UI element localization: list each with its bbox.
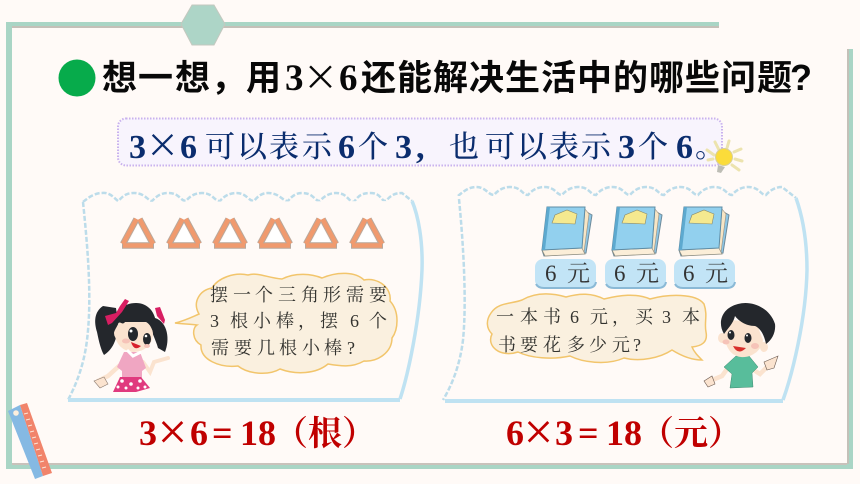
three books	[542, 207, 729, 256]
hint sentence: 个	[638, 131, 668, 164]
title: 一	[138, 59, 173, 98]
hint sentence: 示	[581, 131, 612, 164]
hint sentence: 表	[549, 131, 579, 164]
title: 6	[339, 58, 358, 99]
equation: yuan: 18	[606, 413, 642, 453]
equation: sticks: 3	[139, 413, 157, 453]
hint sentence: ×	[146, 119, 179, 167]
tag 2	[605, 259, 666, 288]
hint sentence: 表	[269, 131, 299, 164]
hint sentence: 个	[358, 131, 388, 164]
title: 中	[577, 59, 612, 98]
equation: yuan: =	[578, 413, 599, 453]
paper card	[68, 193, 422, 400]
girl character	[94, 299, 168, 392]
title: 的	[613, 59, 648, 98]
title: 生	[505, 59, 540, 98]
hint sentence: 6	[180, 129, 197, 166]
equation: yuan: 6	[506, 413, 524, 453]
equation: sticks	[139, 406, 376, 454]
equation: yuan: （元）	[640, 415, 742, 453]
title: 想	[102, 59, 137, 98]
bubble text: 摆一个三角形需要	[210, 285, 387, 305]
hint sentence: 可	[485, 131, 515, 164]
equation: sticks: 18	[240, 413, 276, 453]
equation: sticks: =	[212, 413, 233, 453]
hint sentence: 也	[449, 131, 479, 164]
tag 3	[674, 259, 735, 288]
icon: ruler	[8, 403, 52, 479]
title: 还	[361, 59, 396, 98]
tag 2: 6 元	[614, 261, 659, 286]
speech bubble	[175, 273, 397, 373]
bubble text: 3 根小棒，摆 6 个	[210, 310, 387, 331]
hint sentence: 3	[129, 129, 146, 166]
hint sentence: 。	[695, 131, 725, 164]
bubble text	[210, 285, 387, 358]
hint sentence: 3	[618, 129, 635, 166]
panel: triangle problem	[68, 193, 422, 400]
equation: sticks: 6	[190, 413, 208, 453]
equation: yuan: ×	[522, 406, 555, 454]
title: 能	[397, 59, 432, 98]
bubble text: 书要花多少元?	[498, 335, 641, 355]
panel: book problem	[443, 187, 807, 402]
hint box	[118, 118, 725, 167]
equation: sticks: （根）	[274, 415, 376, 453]
title: 哪	[649, 59, 684, 98]
title: 些	[685, 59, 720, 98]
title: ?	[790, 57, 812, 98]
equation: sticks: ×	[156, 406, 189, 454]
title: 决	[469, 59, 504, 98]
row of six stick triangles	[122, 219, 383, 246]
hint sentence: 6	[676, 129, 693, 166]
title: ×	[303, 50, 338, 101]
hint sentence: ,	[416, 129, 424, 166]
equation: yuan	[506, 406, 742, 454]
hint sentence: 3	[395, 129, 412, 166]
hint sentence: 示	[302, 131, 333, 164]
bubble text: 需要几根小棒?	[211, 337, 355, 358]
hint sentence: 以	[237, 131, 269, 164]
title: 问	[721, 59, 756, 98]
hexagon ornament	[181, 5, 225, 45]
title: ，	[211, 59, 246, 98]
title: 用	[246, 59, 281, 98]
hint sentence: 6	[338, 129, 355, 166]
speech bubble	[487, 294, 706, 362]
price tags	[535, 259, 735, 288]
title: 3	[285, 58, 304, 99]
title: 解	[433, 59, 468, 98]
tag 1	[535, 259, 596, 288]
icon: light bulb	[707, 141, 742, 173]
bubble text	[496, 307, 700, 355]
tag 1: 6 元	[545, 261, 590, 286]
bubble text: 一本书 6 元，买 3 本	[496, 307, 700, 327]
equation: yuan: 3	[555, 413, 573, 453]
title	[102, 50, 812, 101]
green bullet	[58, 60, 96, 96]
hint sentence: 可	[205, 131, 235, 164]
title: 题	[757, 59, 792, 98]
title: 活	[541, 59, 576, 98]
hint sentence: 以	[517, 131, 549, 164]
hint sentence	[129, 119, 725, 167]
boy character	[704, 303, 778, 388]
tag 3: 6 元	[683, 261, 728, 286]
title: 想	[175, 59, 210, 98]
paper card	[443, 187, 807, 402]
